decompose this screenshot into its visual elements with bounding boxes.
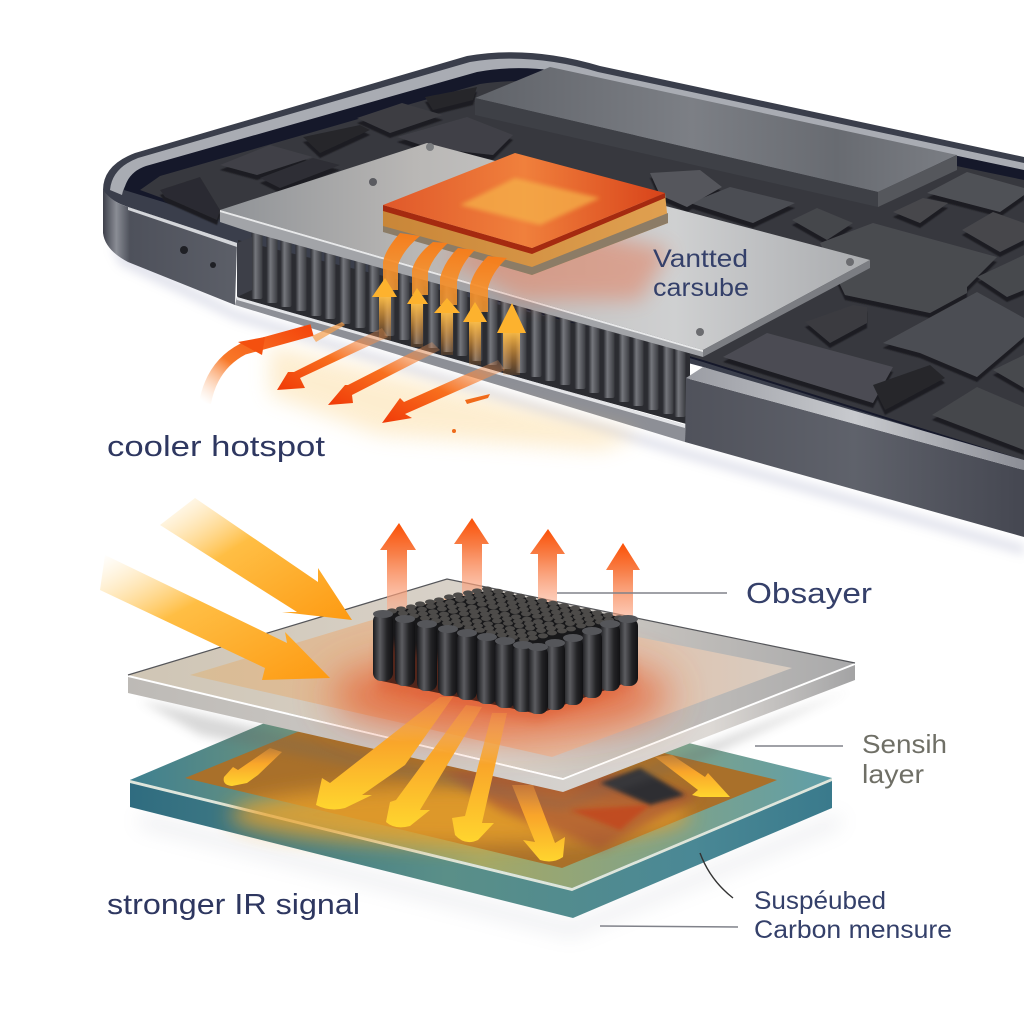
- carbon nanotube pillar array: [373, 586, 638, 722]
- heatsink base rail: [235, 297, 685, 442]
- component tray: [140, 81, 1024, 460]
- red heat stain around chip: [440, 225, 670, 300]
- label: obsayer: Obsayer: [746, 578, 872, 610]
- label: stronger IR signal: stronger IR signal: [107, 889, 360, 921]
- frame highlight band: [110, 59, 1024, 195]
- components: [160, 87, 1024, 450]
- orange heat ribbons: [383, 233, 507, 312]
- label: sensing layer: layer: [862, 759, 924, 789]
- processor chip: [383, 153, 668, 275]
- silver spreader plate: [220, 143, 870, 357]
- corner post beside fins: [237, 237, 252, 297]
- exhaust glow: [270, 345, 640, 450]
- soft shadows beneath plates: [140, 815, 840, 935]
- heatsink backing and fins: [238, 229, 690, 425]
- left side face: [103, 190, 237, 305]
- exhaust arrows: [205, 322, 505, 433]
- label: vented carsube: [653, 245, 749, 302]
- label: suspended carbon measure: Carbon mensure: [754, 916, 952, 944]
- label: suspended carbon measure: Suspéubed: [754, 887, 886, 915]
- label: cooler hotspot: cooler hotspot: [107, 431, 325, 463]
- label: vented carsube: carsube: [653, 274, 749, 302]
- shadow of silver plate: [140, 690, 850, 810]
- label: sensing layer: Sensih: [862, 729, 947, 759]
- device: phone housing with components: [103, 52, 1024, 555]
- battery lid panel: [475, 67, 957, 207]
- housing outer frame: [103, 52, 1024, 470]
- incoming arrows: [100, 498, 352, 680]
- soft shadow under housing: [110, 245, 1024, 555]
- leader lines: [557, 593, 843, 927]
- front lower edge block: [685, 367, 1024, 537]
- inner recess: [124, 68, 1024, 462]
- middle silver plate: [128, 579, 855, 792]
- lower stack diagram: [100, 498, 952, 944]
- upward arrows through fins: [372, 278, 526, 375]
- label: vented carsube: Vantted: [653, 245, 748, 273]
- label: suspended carbon measure: [754, 887, 952, 944]
- downward yellow arrows: [224, 697, 730, 861]
- bottom teal sensor plate: [130, 670, 832, 918]
- label: sensing layer: [862, 729, 947, 789]
- upward red arrows: [380, 518, 640, 625]
